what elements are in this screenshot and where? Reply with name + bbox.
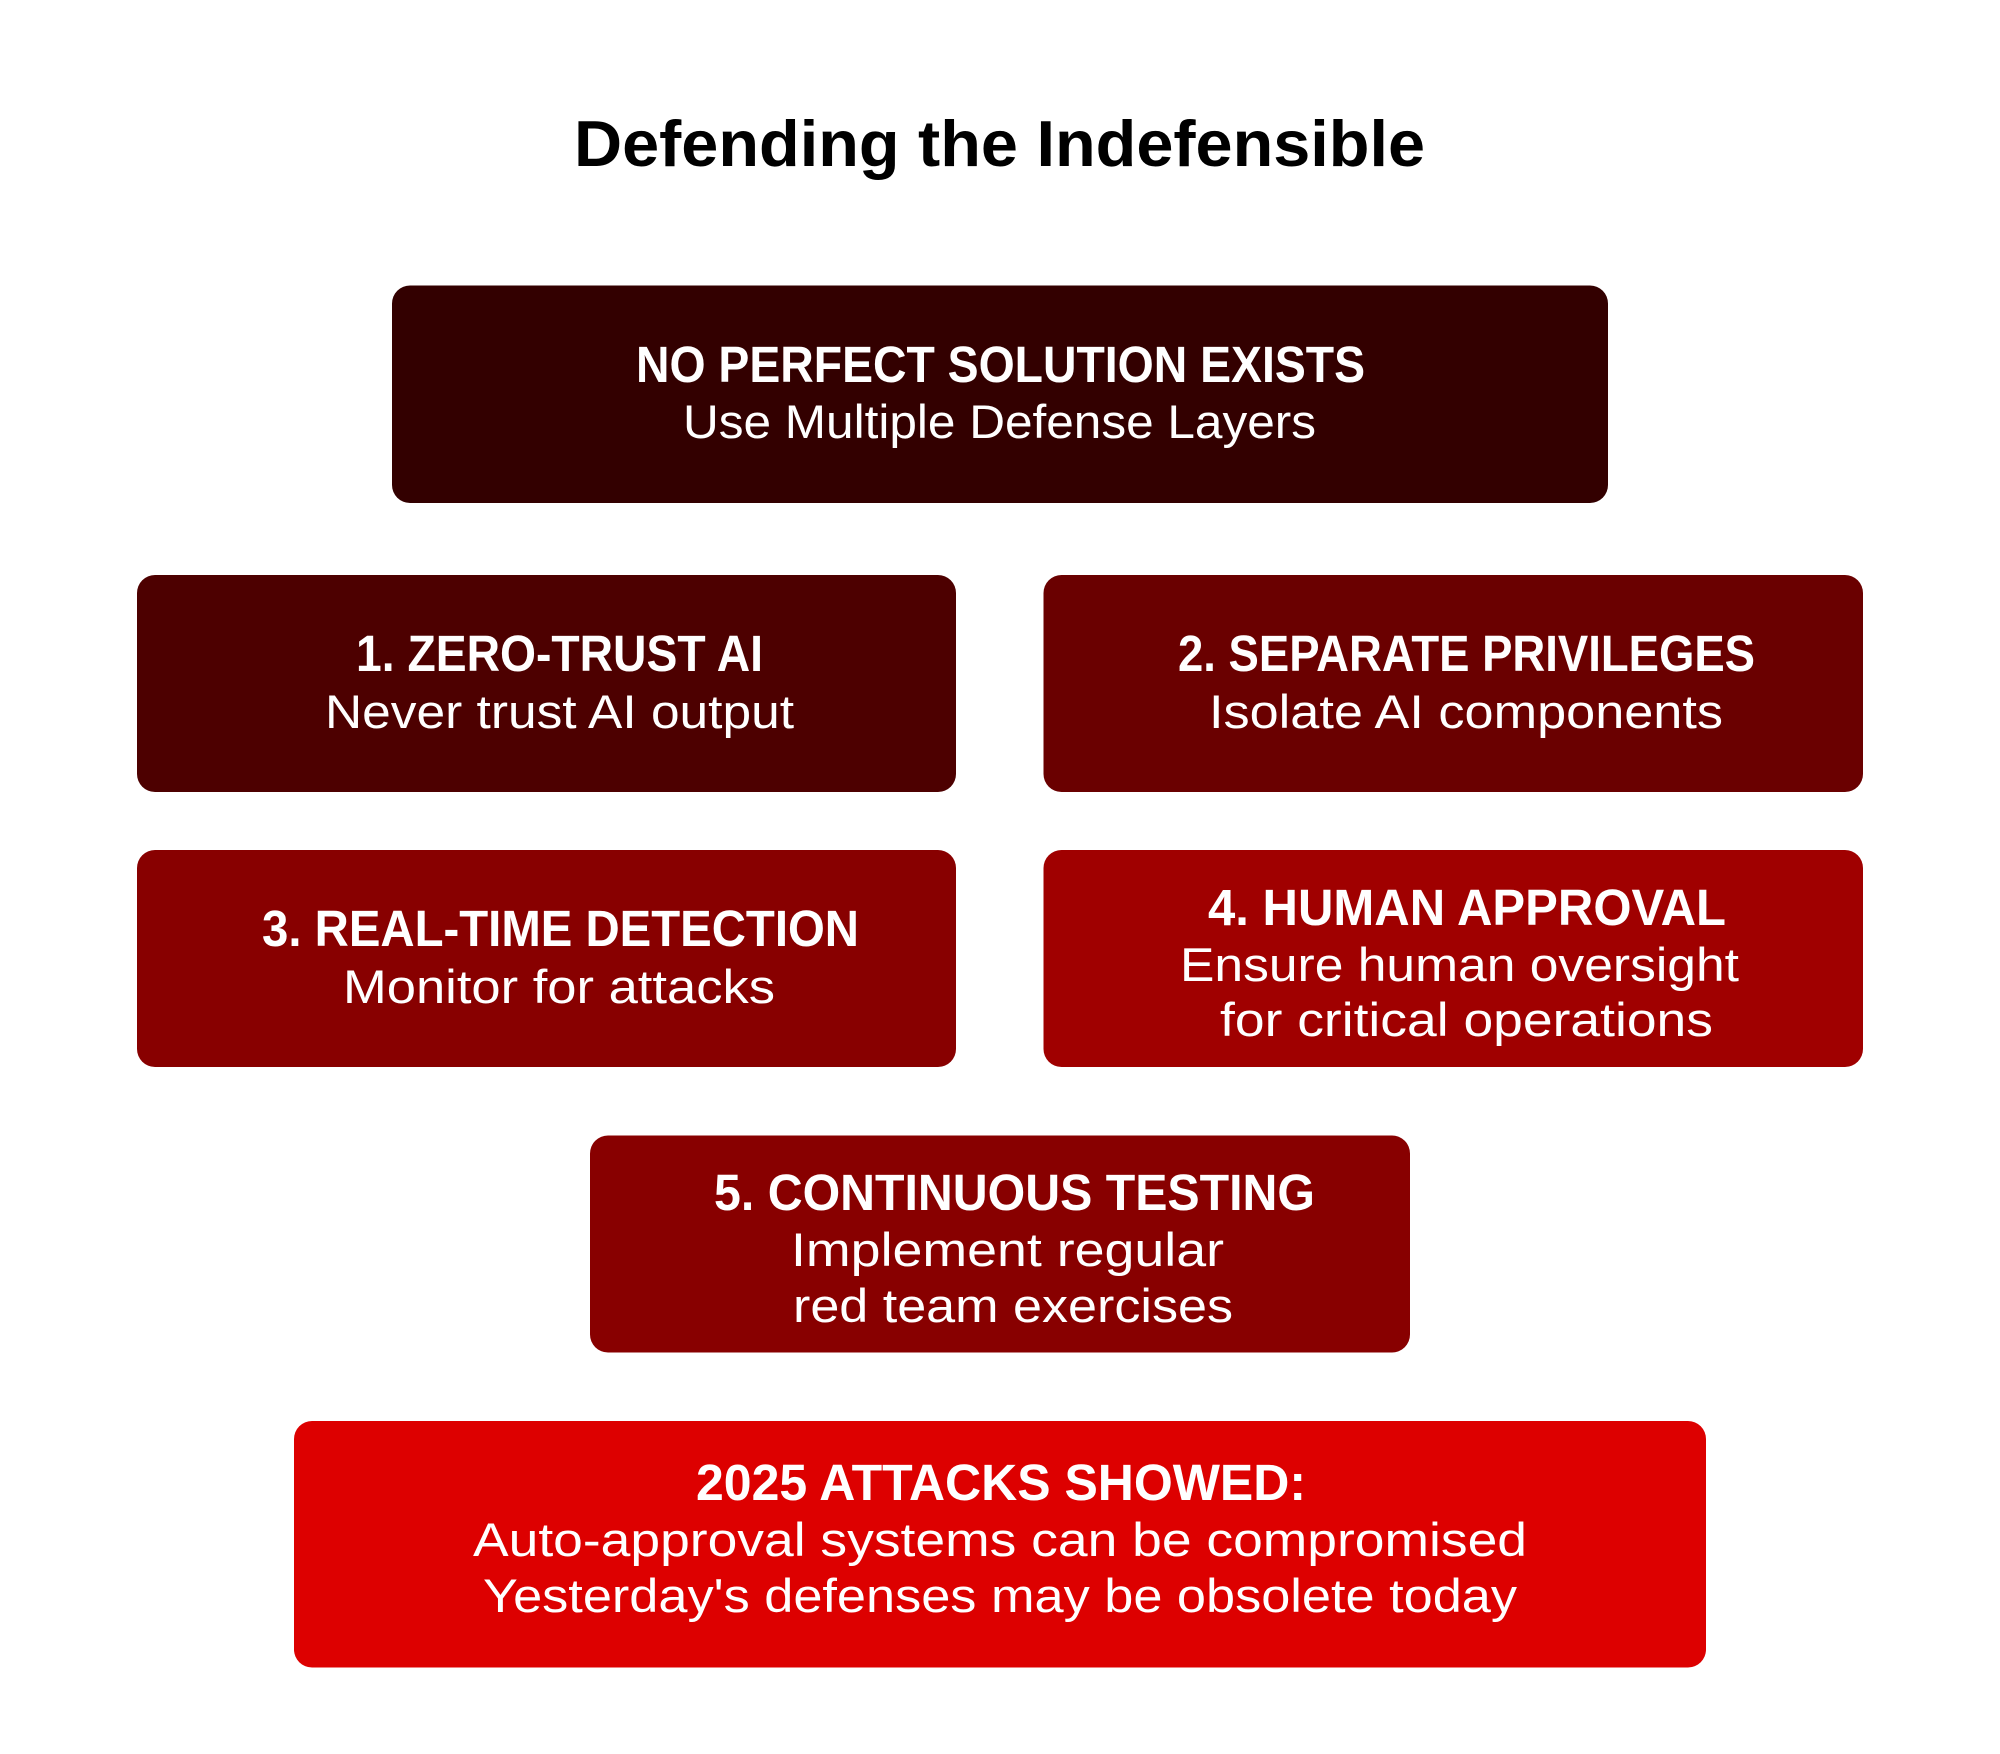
panel text: red team exercises <box>791 1223 1233 1332</box>
panel: no perfect solution <box>392 286 1608 503</box>
panel heading: human approval: 4. HUMAN APPROVAL <box>1208 879 1726 936</box>
panel text: attack findings: Auto-approval systems can be compromised <box>473 1513 1527 1566</box>
panel text: monitor for attacks: Monitor for attacks <box>343 960 775 1013</box>
panel text: isolate AI components: Isolate AI components <box>1209 685 1723 738</box>
panel: 2025 attacks <box>294 1421 1706 1668</box>
panel heading: no perfect solution: NO PERFECT SOLUTION EXISTS <box>636 336 1365 393</box>
panel text: attack findings: Yesterday's defenses may be obsolete today <box>483 1569 1518 1622</box>
panel: real-time detection <box>137 850 956 1067</box>
panel heading: zero-trust AI: 1. ZERO-TRUST AI <box>356 625 763 682</box>
panel heading: continuous testing: 5. CONTINUOUS TESTING <box>714 1164 1315 1221</box>
panel text: never trust AI output: Never trust AI output <box>325 685 794 738</box>
panel: separate privileges <box>1044 575 1863 792</box>
panel heading: real-time detection: 3. REAL-TIME DETECTION <box>262 900 859 957</box>
panel: continuous testing <box>590 1136 1410 1352</box>
panel text: red team exercises: red team exercises <box>793 1279 1233 1332</box>
panel heading: separate privileges: 2. SEPARATE PRIVILEGES <box>1178 625 1755 682</box>
panel text: defense layers: Use Multiple Defense Layers <box>683 395 1316 448</box>
panel text: attack findings <box>473 1513 1527 1622</box>
panel text: red team exercises: Implement regular <box>791 1223 1224 1276</box>
panel text: human oversight: Ensure human oversight <box>1180 938 1739 991</box>
title: Defending the Indefensible <box>574 107 1425 180</box>
panel text: human oversight: for critical operations <box>1220 993 1713 1046</box>
panel text: human oversight <box>1180 938 1739 1046</box>
panel heading: 2025 attacks showed: 2025 ATTACKS SHOWED: <box>696 1454 1306 1511</box>
panel: zero-trust AI <box>137 575 956 792</box>
panel: human approval <box>1044 850 1863 1067</box>
